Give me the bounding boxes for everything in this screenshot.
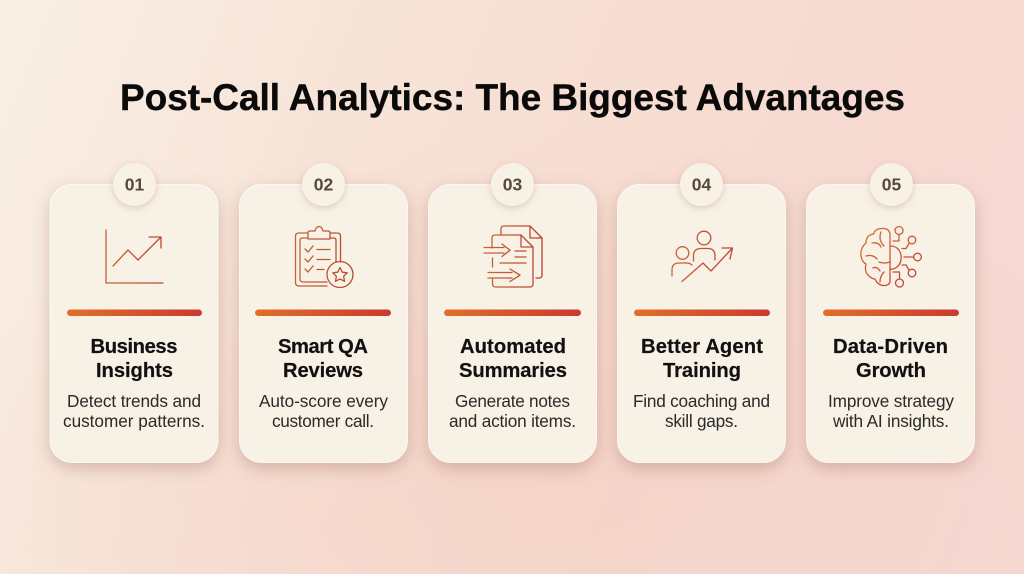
card background xyxy=(240,184,408,462)
icon: line chart with rising arrow xyxy=(106,230,163,283)
heading: Data-Driven xyxy=(833,336,948,358)
number badge 02: 02 xyxy=(314,174,333,194)
accent bar xyxy=(255,310,391,316)
heading: Insights xyxy=(96,360,173,382)
accent bar xyxy=(67,310,202,316)
icon: brain with circuit nodes xyxy=(861,226,921,287)
description xyxy=(449,391,576,431)
description: Find coaching and xyxy=(633,391,770,411)
description: skill gaps. xyxy=(665,411,738,431)
card background xyxy=(428,184,596,462)
number badge 03: 03 xyxy=(503,174,522,194)
description xyxy=(633,391,770,431)
heading xyxy=(278,336,368,382)
heading: Reviews xyxy=(283,360,363,382)
heading xyxy=(641,336,763,382)
icon: clipboard checklist with star xyxy=(296,226,353,288)
number badge 01: 01 xyxy=(125,174,144,194)
accent bar xyxy=(634,310,770,316)
description: with AI insights. xyxy=(832,411,949,431)
description xyxy=(63,391,205,431)
description: and action items. xyxy=(449,411,576,431)
number badge 02 xyxy=(302,163,345,206)
panel: card 01 Business Insights xyxy=(50,163,218,462)
card background xyxy=(50,184,218,462)
heading: Better Agent xyxy=(641,336,763,358)
number badge 04 xyxy=(680,163,723,206)
accent bar xyxy=(823,310,959,316)
number badge 05: 05 xyxy=(882,174,901,194)
description xyxy=(259,391,388,431)
heading xyxy=(90,336,178,382)
heading: Summaries xyxy=(459,360,567,382)
heading xyxy=(833,336,948,382)
number badge 05 xyxy=(870,163,913,206)
title: Post-Call Analytics: The Biggest Advantages xyxy=(120,77,905,118)
description: Generate notes xyxy=(455,391,570,411)
description: Improve strategy xyxy=(828,391,954,411)
description: Auto-score every xyxy=(259,391,388,411)
number badge 03 xyxy=(491,163,534,206)
description: customer call. xyxy=(272,411,374,431)
accent bar xyxy=(444,310,581,316)
heading: Growth xyxy=(856,360,926,382)
card background xyxy=(618,184,786,462)
description: Detect trends and xyxy=(67,391,201,411)
card background xyxy=(806,184,974,462)
icon: documents with arrows xyxy=(484,226,542,287)
icon: people with growth arrow xyxy=(672,231,732,282)
panel: card 02 Smart QA Reviews xyxy=(240,163,408,462)
heading: Smart QA xyxy=(278,336,368,358)
description: customer patterns. xyxy=(63,411,205,431)
panel: card 03 Automated Summaries xyxy=(428,163,596,462)
heading: Training xyxy=(663,360,741,382)
heading: Automated xyxy=(460,336,566,358)
number badge 04: 04 xyxy=(692,174,711,194)
heading: Business xyxy=(90,336,178,358)
panel: card 04 Better Agent Training xyxy=(618,163,786,462)
panel: card 05 Data-Driven Growth xyxy=(806,163,974,462)
heading xyxy=(459,336,567,382)
description xyxy=(828,391,954,431)
number badge 01 xyxy=(113,163,156,206)
